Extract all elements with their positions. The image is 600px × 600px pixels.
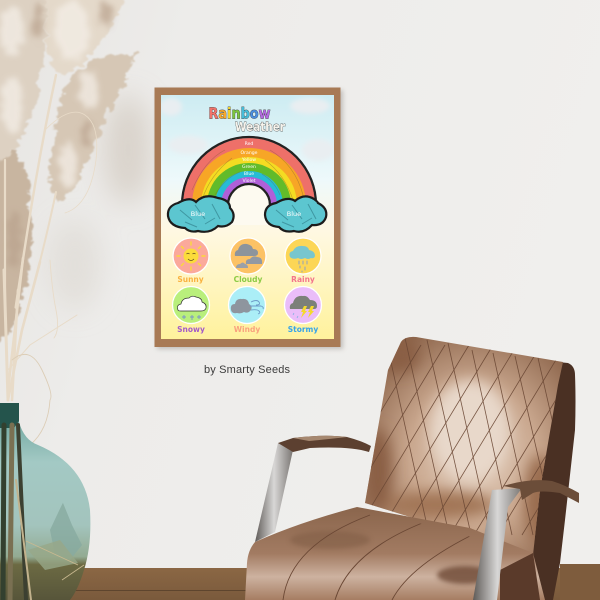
plume shadows xyxy=(7,1,113,270)
left armrest leather pad xyxy=(278,436,371,452)
cloud label: Blue xyxy=(191,210,205,218)
plume: right xyxy=(48,54,136,206)
left armrest metal strap xyxy=(255,443,293,542)
plume: left xyxy=(0,0,46,165)
plume highlights xyxy=(0,0,97,189)
weather item: cloudy xyxy=(230,238,266,284)
colour band labels: Orange xyxy=(241,150,258,156)
chair back side panel xyxy=(520,362,576,600)
wall shadow from pampas xyxy=(49,95,152,310)
weather item: windy: Windy xyxy=(234,325,260,334)
colour band labels: Green xyxy=(242,164,256,170)
weather item: rainy xyxy=(285,238,321,284)
frame shadow xyxy=(157,90,343,349)
scribble texture xyxy=(192,150,303,200)
pampas grass decoration xyxy=(0,0,136,455)
right armrest leather pad xyxy=(503,480,579,503)
diamond stitching xyxy=(371,338,556,536)
cloud: left xyxy=(168,196,234,232)
cloud: right xyxy=(265,196,326,232)
weather item: rainy: Rainy xyxy=(291,275,315,284)
rainbow xyxy=(182,137,316,225)
weather item: snowy xyxy=(172,286,210,334)
leather armchair xyxy=(245,335,600,600)
sky clouds xyxy=(161,97,330,146)
weather item: cloudy: Cloudy xyxy=(234,275,263,284)
right seat side xyxy=(500,553,540,600)
seat stitching and shading xyxy=(283,515,493,600)
weather item: sunny xyxy=(173,238,209,284)
colour band labels: Blue xyxy=(244,171,254,177)
weather item: snowy: Snowy xyxy=(177,325,205,334)
credit caption: by Smarty Seeds xyxy=(204,364,290,376)
plume: top centre xyxy=(44,0,128,78)
weather item: stormy: Stormy xyxy=(288,325,318,334)
wooden frame xyxy=(154,88,340,347)
poster background xyxy=(161,95,334,339)
weather item: sunny: Sunny xyxy=(177,275,204,284)
colour band labels xyxy=(241,141,258,184)
back shading xyxy=(365,337,556,544)
title: Rainbow: Rainbow xyxy=(208,104,270,122)
title: Weather: Weather xyxy=(235,119,286,134)
right armrest metal strap xyxy=(473,488,522,600)
framed poster xyxy=(154,88,343,349)
weather item: stormy xyxy=(284,286,322,334)
colour band labels: Violet xyxy=(242,178,256,184)
wooden floor xyxy=(0,564,600,600)
glass vase xyxy=(0,403,90,600)
colour band labels: Yellow xyxy=(241,157,256,163)
chair back cushion xyxy=(365,337,563,555)
chair seat xyxy=(245,507,545,600)
weather item: windy xyxy=(228,286,266,334)
poster artwork xyxy=(168,104,326,334)
cloud label: Blue xyxy=(287,210,301,218)
colour band labels: Red xyxy=(245,141,253,147)
stems xyxy=(4,75,97,455)
plume: lower dark xyxy=(0,152,32,350)
